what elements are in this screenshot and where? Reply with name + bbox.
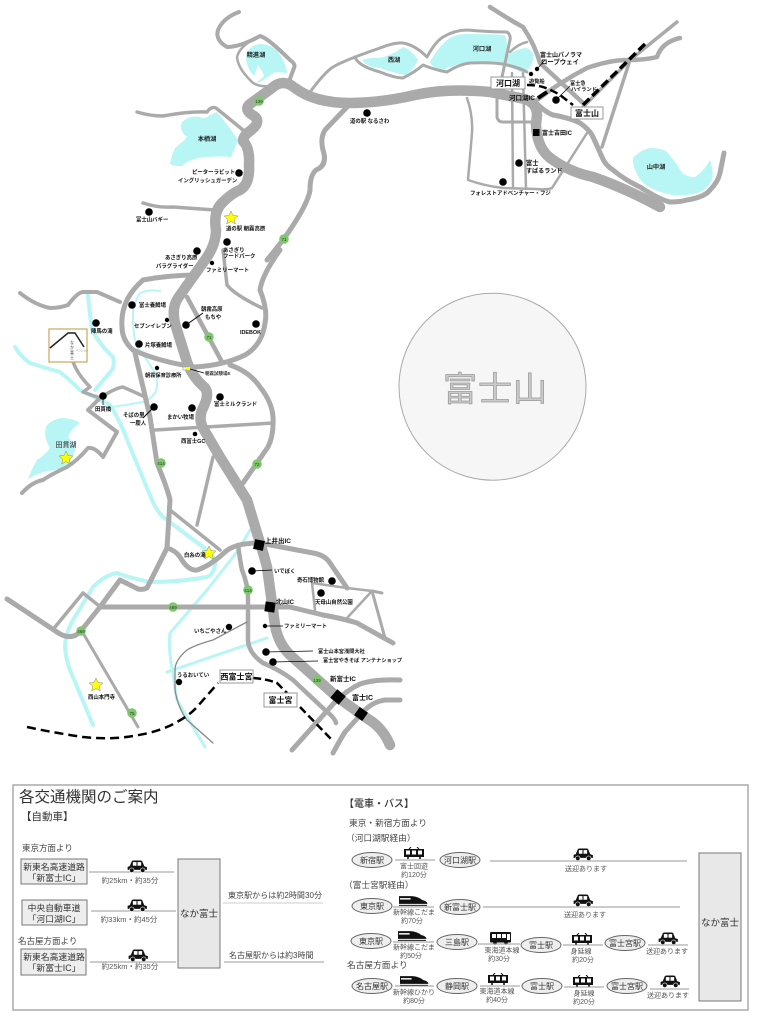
IC names: 上井出IC xyxy=(265,536,291,545)
rail route 3: 東海道本線 xyxy=(484,946,520,954)
main expressway xyxy=(174,83,660,745)
map points of interest: ファミリーマート xyxy=(284,623,327,630)
route badges: 469 xyxy=(77,629,85,634)
rail route 2 xyxy=(352,895,680,925)
destination box right xyxy=(699,853,741,1001)
inset logo sign: 富 xyxy=(70,349,74,355)
via Fujinomiya label: （富士宮駅経由） xyxy=(344,879,414,890)
map points of interest: 朝霧試験場E xyxy=(205,370,231,377)
Nagoya station time: 名古屋駅からは約3時間 xyxy=(229,950,313,960)
IC names: 河口湖IC xyxy=(509,93,535,102)
rail route 3: 約50分 xyxy=(400,951,422,960)
rail route 4: 送迎あります xyxy=(647,990,689,1000)
map points of interest: 遊覧船 xyxy=(529,77,545,85)
rail route 4: 約80分 xyxy=(403,996,425,1005)
transport panel xyxy=(13,785,748,1010)
lake names: 西湖 xyxy=(388,56,400,64)
lake names: 河口湖 xyxy=(473,45,491,53)
from Nagoya rail label: 名古屋方面より xyxy=(347,959,408,970)
lake: 河口湖 xyxy=(430,34,533,73)
car route 2: 中央自動車道 xyxy=(28,902,81,913)
map points of interest: 西富士GC xyxy=(181,437,205,445)
train and bus heading: 【電車・バス】 xyxy=(344,797,414,810)
inset logo sign: か xyxy=(70,344,74,350)
lake: 山中湖 xyxy=(633,148,713,195)
Mt Fuji circle xyxy=(399,293,586,480)
map points of interest: いでぼく xyxy=(274,567,295,575)
railway dashed lines xyxy=(27,42,647,740)
rail route 1: 富士回遊 xyxy=(400,862,428,870)
lakes xyxy=(28,34,713,479)
map points of interest: フォレストアドベンチャー・フジ xyxy=(470,190,551,197)
rail route 3: 新幹線こだま xyxy=(393,942,435,952)
map points of interest: 富士養鱒場 xyxy=(139,301,167,309)
rail route 2: 約70分 xyxy=(401,916,423,925)
rail route 3: 約30分 xyxy=(488,954,510,963)
map points of interest: 白糸の滝 xyxy=(184,551,206,559)
from Tokyo label: 東京方面より xyxy=(22,843,73,853)
destination box right: なか富士 xyxy=(701,917,739,929)
rail route 3: 身延線 xyxy=(570,946,592,956)
map points of interest: 富士山バギー xyxy=(136,216,168,224)
star: 白糸の滝 xyxy=(202,546,216,559)
star: 西山本門寺 xyxy=(89,678,103,691)
station signs: 富士宮 xyxy=(268,695,292,705)
map points of interest: あさぎり高原 xyxy=(165,254,198,262)
map points of interest: セブンイレブン xyxy=(134,322,172,330)
rail route 3: 東京駅 xyxy=(359,936,383,946)
IC names: 北山IC xyxy=(276,598,295,606)
interchange blocks xyxy=(253,129,540,721)
stars xyxy=(59,211,238,691)
route badges: 71 xyxy=(206,335,212,340)
map points of interest: 朝霧保育診療所 xyxy=(145,371,182,379)
panel title: 各交通機関のご案内 xyxy=(19,788,159,806)
car route 3: 「新富士IC」 xyxy=(28,962,80,973)
star: 田貫湖 xyxy=(59,451,73,464)
map points of interest: 道の駅 なるさわ xyxy=(350,117,390,125)
car route 3: 新東名高速道路 xyxy=(23,951,85,962)
map points of interest: 富士急 xyxy=(570,79,586,87)
car section heading: 【自動車】 xyxy=(21,810,74,823)
IC: 新富士 xyxy=(330,689,346,705)
map points of interest: 天母山自然公園 xyxy=(315,598,353,606)
rail route 3: 約20分 xyxy=(572,955,594,964)
lake: 田貫湖 xyxy=(28,418,80,479)
IC names: 新富士IC xyxy=(330,674,356,683)
map points of interest: 一慶人 xyxy=(130,419,147,427)
route badges: 75 xyxy=(129,711,135,716)
car route 1: 約25km・約35分 xyxy=(102,875,159,885)
map points of interest: 道の駅 朝霧高原 xyxy=(226,224,266,232)
lake names: 山中湖 xyxy=(647,163,665,171)
Tokyo station time: 東京駅からは約2時間30分 xyxy=(228,890,322,900)
inset logo sign: ペンション xyxy=(76,348,89,352)
rail route 1: 河口湖駅 xyxy=(444,855,476,865)
rail route 2: 新富士駅 xyxy=(444,902,476,912)
rivers xyxy=(15,290,267,747)
destination box left xyxy=(178,859,220,968)
inset logo sign: 士 xyxy=(70,354,74,360)
IC names: 富士吉田IC xyxy=(542,129,573,137)
car route 1: 新東名高速道路 xyxy=(23,861,85,872)
IC: 富士 xyxy=(354,707,368,721)
map points of interest: もちや xyxy=(205,313,222,321)
map points of interest: 富士ミルクランド xyxy=(214,400,257,408)
map points of interest: あさぎり xyxy=(223,246,245,254)
map points of interest: ファミリーマート xyxy=(206,267,249,274)
IC names xyxy=(265,93,573,702)
station signs: 西富士宮 xyxy=(220,672,252,682)
car route 3: 約25km・約35分 xyxy=(102,961,159,971)
from Nagoya label: 名古屋方面より xyxy=(18,936,77,946)
map points of interest: 富士山本宮浅間大社 xyxy=(318,647,366,655)
map points of interest: 田貫橋 xyxy=(95,405,112,413)
route badges: 71 xyxy=(281,237,287,242)
Nagoya station time xyxy=(224,950,324,962)
rail route 2: 東京駅 xyxy=(360,901,384,911)
rail route 4: 名古屋駅 xyxy=(356,981,388,991)
route badges: 469 xyxy=(169,605,177,610)
map points of interest: パラグライダー xyxy=(156,262,194,270)
rail route 4: 静岡駅 xyxy=(445,981,469,991)
map points of interest: すばるランド xyxy=(526,167,563,175)
route badges: 139 xyxy=(255,99,263,104)
map points of interest: ロープウェイ xyxy=(541,57,579,66)
star: 道の駅 朝霧高原 xyxy=(224,211,238,224)
rail route 4: 富士駅 xyxy=(530,981,554,991)
map points of interest: 片塚養鱒場 xyxy=(145,341,173,349)
Tokyo station time xyxy=(223,890,323,903)
inset logo sign xyxy=(49,329,89,362)
secondary roads xyxy=(7,7,724,753)
map points of interest: 富士 xyxy=(526,158,539,167)
lake names xyxy=(56,45,665,449)
map points of interest: 西山本門寺 xyxy=(88,693,116,701)
destination box left: なか富士 xyxy=(180,908,218,920)
map points of interest: ハイランド xyxy=(571,86,597,93)
route badges: 414 xyxy=(157,461,165,466)
rail route 2: 送迎あります xyxy=(564,910,606,919)
route badges: 414 xyxy=(244,588,252,593)
IC: 富士吉田 xyxy=(533,129,540,136)
via Kawaguchiko label: （河口湖駅経由） xyxy=(346,832,416,843)
car route 2 xyxy=(22,900,176,925)
from Tokyo Shinjuku label: 東京・新宿方面より xyxy=(349,817,427,828)
route badges: 72 xyxy=(254,462,260,467)
rail route 3: 富士宮駅 xyxy=(609,938,641,948)
route badges: 139 xyxy=(313,678,321,683)
rail route 4: 東海道本線 xyxy=(480,986,514,996)
Mt Fuji circle: 富士山 xyxy=(443,371,547,409)
rail route 1: 新宿駅 xyxy=(360,855,384,865)
map points of interest: まかい牧場 xyxy=(167,413,195,421)
car route 2: 「河口湖IC」 xyxy=(28,913,80,924)
map points of interest: フードパーク xyxy=(223,252,255,260)
lake names: 本栖湖 xyxy=(198,135,216,143)
lake names: 精進湖 xyxy=(247,51,265,59)
rail route 4: 新幹線ひかり xyxy=(393,988,435,996)
rail route 4: 約40分 xyxy=(486,995,508,1004)
route badges xyxy=(76,96,322,718)
rail route 4 xyxy=(352,973,689,1006)
lake names: 田貫湖 xyxy=(56,440,76,449)
lake: 西湖 xyxy=(362,47,418,75)
map points of interest: ピーターラビット xyxy=(192,168,235,176)
map points of interest: 陣馬の滝 xyxy=(91,327,113,335)
map points of interest: いちごやさん xyxy=(194,627,227,635)
rail route 2: 新幹線こだま xyxy=(393,908,435,916)
car route 1 xyxy=(21,859,174,885)
rail route 1 xyxy=(352,847,687,879)
rail route 4: 富士宮駅 xyxy=(611,981,643,991)
IC names: 富士IC xyxy=(352,693,373,702)
rail route 1: 送迎あります xyxy=(565,864,607,873)
station signs: 河口湖 xyxy=(496,78,520,88)
inset logo sign: な xyxy=(70,339,74,345)
map points of interest: IDEBOK xyxy=(240,330,261,336)
rail route 3: 富士駅 xyxy=(529,940,553,950)
station signs xyxy=(220,77,603,707)
map points of interest: 朝霧高原 xyxy=(201,305,223,313)
rail route 3: 送迎あります xyxy=(646,946,688,956)
lake: 精進湖 xyxy=(246,44,287,83)
rail route 4: 約20分 xyxy=(573,997,595,1006)
map points of interest: うるおいてい xyxy=(177,672,210,679)
rail route 4: 身延線 xyxy=(574,988,594,998)
map points of interest: 富士山パノラマ xyxy=(540,51,582,59)
car route 3 xyxy=(21,949,176,975)
station signs: 富士山 xyxy=(575,108,599,118)
car route 2: 約33km・約45分 xyxy=(101,914,158,924)
map points of interest: そばの里 xyxy=(123,411,145,419)
lake: 本栖湖 xyxy=(170,112,238,166)
rail route 3 xyxy=(351,931,688,964)
rail route 3: 三島駅 xyxy=(445,937,469,947)
IC: 上井出 xyxy=(253,539,265,551)
map points of interest: 奇石博物館 xyxy=(297,576,325,584)
map points of interest xyxy=(88,51,597,701)
car route 1: 「新富士IC」 xyxy=(28,872,80,883)
map points of interest: イングリッシュガーデン xyxy=(178,176,238,184)
map points of interest: 富士宮やきそば アンテナショップ xyxy=(323,656,403,664)
rail route 1: 約120分 xyxy=(401,870,427,879)
IC: 北山 xyxy=(264,601,276,613)
